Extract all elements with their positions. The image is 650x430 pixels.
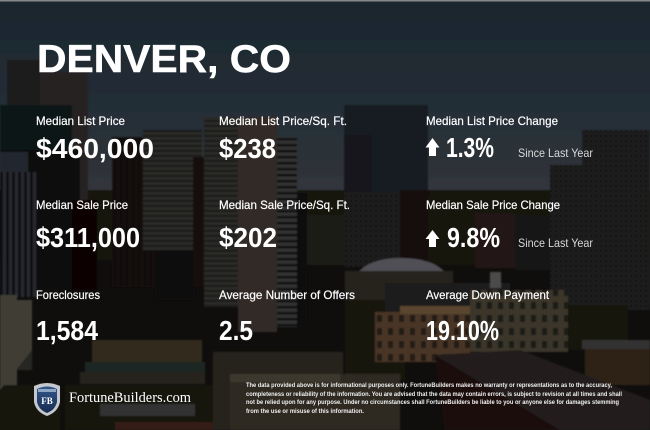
disclaimer: completeness or reliability of the information. You are advised that the data may contain errors, is subject to revision at all times and shall (246, 391, 622, 398)
stat: median sale price per sq ft: Median Sale Price/Sq. Ft. (219, 198, 350, 212)
stat: median sale price: $311,000 (36, 222, 140, 253)
stat: median list price (36, 114, 154, 164)
stat: median sale price per sq ft: $202 (219, 222, 277, 253)
stat: median list price per sq ft: $238 (219, 133, 276, 164)
stat: median list price: $460,000 (36, 133, 154, 164)
disclaimer (246, 382, 622, 415)
stat: median sale price change: 9.8% (447, 222, 500, 253)
stat: median sale price change: Median Sale Price Change (426, 198, 560, 212)
stat: average number of offers (219, 288, 355, 346)
stat: foreclosures: 1,584 (36, 315, 98, 346)
stat: median list price change: Since Last Year (518, 146, 593, 160)
icon: up arrow (426, 138, 440, 156)
stat: foreclosures (36, 288, 100, 346)
disclaimer: not be relied upon for any purpose. Under no circumstances shall FortuneBuilders be liable to you or anyone else for damages stemming (246, 399, 619, 406)
stat: median list price change: Median List Price Change (426, 114, 558, 128)
stat: median list price: Median List Price (36, 114, 125, 128)
icon: up arrow (426, 230, 440, 247)
icon: shield (34, 383, 60, 416)
stat: average down payment: Average Down Payment (426, 288, 550, 302)
icon: shield: FB (41, 396, 53, 406)
stat: median list price change: 1.3% (446, 132, 494, 163)
stat: median sale price: Median Sale Price (36, 198, 128, 212)
logo: FortuneBuilders: FortuneBuilders.com (69, 390, 191, 406)
stat: median list price per sq ft: Median List Price/Sq. Ft. (219, 114, 347, 128)
stat: median sale price change (426, 198, 593, 253)
logo: FortuneBuilders (34, 383, 191, 416)
disclaimer: The data provided above is for informational purposes only. FortuneBuilders makes no warranty or representations as to the accuracy, (246, 382, 612, 389)
stat: foreclosures: Foreclosures (36, 288, 100, 302)
stat: average number of offers: 2.5 (219, 315, 253, 346)
stat: median list price change (426, 114, 593, 163)
stat: average down payment: 19.10% (426, 315, 499, 346)
disclaimer: from the use or misuse of this information. (246, 408, 364, 415)
stat: median sale price change: Since Last Year (518, 236, 593, 250)
stat: median list price per sq ft (219, 114, 347, 164)
title: DENVER, CO (37, 38, 291, 81)
stat: average number of offers: Average Number of Offers (219, 288, 355, 302)
stat: median sale price (36, 198, 140, 253)
stat: average down payment (426, 288, 550, 346)
stat: median sale price per sq ft (219, 198, 350, 253)
